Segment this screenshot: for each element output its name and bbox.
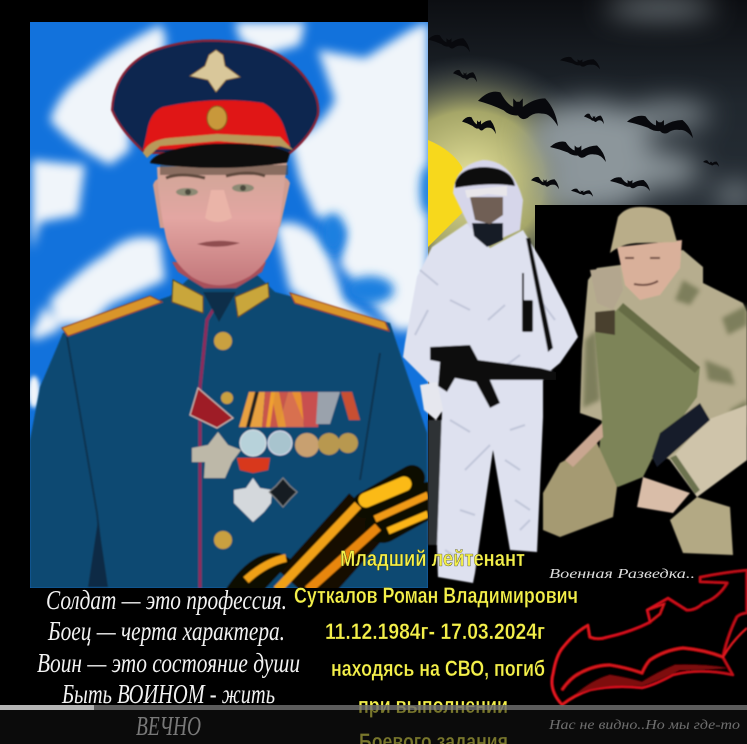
grey shade behind legs [428, 420, 442, 545]
left trouser [543, 443, 617, 537]
caption: military reconnaissance: Военная Разведка.. [549, 567, 695, 582]
cap badge [207, 106, 227, 130]
line: forever: ВЕЧНО [136, 711, 201, 741]
photo: soldier in white camouflage [403, 160, 578, 583]
bats [428, 35, 719, 197]
inner red ridge [562, 628, 747, 690]
red bat emblem [552, 570, 747, 705]
soldier face [470, 197, 503, 224]
progress bar [0, 705, 747, 710]
hood [453, 160, 523, 240]
moon [428, 140, 463, 247]
glove [420, 382, 443, 420]
panel: dark sky with moon [428, 0, 747, 257]
red glow band [575, 665, 728, 695]
fur collar [590, 267, 623, 310]
blue gaps in clouds [321, 166, 436, 304]
pale sleeve [670, 405, 747, 497]
St George ribbon [224, 478, 428, 592]
collar tabs [172, 280, 269, 317]
video control overlay [0, 710, 747, 744]
eyes and smile [625, 258, 660, 285]
panel: portrait on sky [28, 22, 436, 592]
camo patches [583, 280, 747, 430]
right hand [637, 477, 690, 513]
ear line [647, 604, 664, 622]
goggles [465, 186, 507, 198]
pouch [652, 403, 710, 467]
line: soldier: Солдат — это профессия. [46, 585, 287, 615]
peaked cap [112, 40, 318, 168]
facial features [160, 165, 288, 247]
face [157, 163, 287, 285]
uniform jacket [30, 268, 428, 588]
left hand [565, 423, 603, 467]
line: fighter: Боец — черта характера. [47, 616, 285, 646]
epaulettes [62, 293, 389, 336]
black photo backdrop [535, 205, 747, 555]
rifle, strap and radio [430, 238, 556, 408]
line: warrior: Воин — это состояние души [37, 648, 300, 678]
yellow name: Суткалов Роман Владимирович [294, 583, 578, 608]
eagle emblem [190, 50, 240, 92]
neck shadow [472, 223, 503, 247]
camo jacket [580, 250, 747, 497]
medals [190, 388, 360, 522]
camo cap [610, 207, 677, 253]
caption: motto: Нас не видно..Но мы где-то [548, 718, 740, 733]
sky with clouds [28, 22, 436, 588]
ribbon bars [239, 392, 360, 427]
yellow glow [428, 62, 579, 256]
suit blotches [415, 270, 555, 560]
cuff [670, 455, 700, 494]
buttons [214, 332, 233, 549]
olive vest [595, 303, 700, 487]
clouds [528, 0, 747, 212]
yellow text line 4: находясь на СВО, погиб [331, 656, 545, 681]
yellow dates: 11.12.1984г- 17.03.2024г [325, 619, 545, 644]
face [617, 240, 682, 300]
yellow text line 5: при выполнении [358, 693, 508, 718]
ears [153, 177, 290, 228]
white suit [403, 223, 578, 583]
bat body [552, 570, 747, 705]
right trouser [670, 497, 733, 555]
collar opening [203, 292, 236, 322]
jacket seams and piping [67, 300, 380, 588]
helmet [455, 167, 515, 188]
photo: soldier in camouflage [543, 207, 747, 555]
line: to be a warrior: Быть ВОИНОМ - жить [61, 679, 275, 709]
yellow rank: Младший лейтенант [340, 546, 525, 571]
neck [172, 262, 266, 288]
